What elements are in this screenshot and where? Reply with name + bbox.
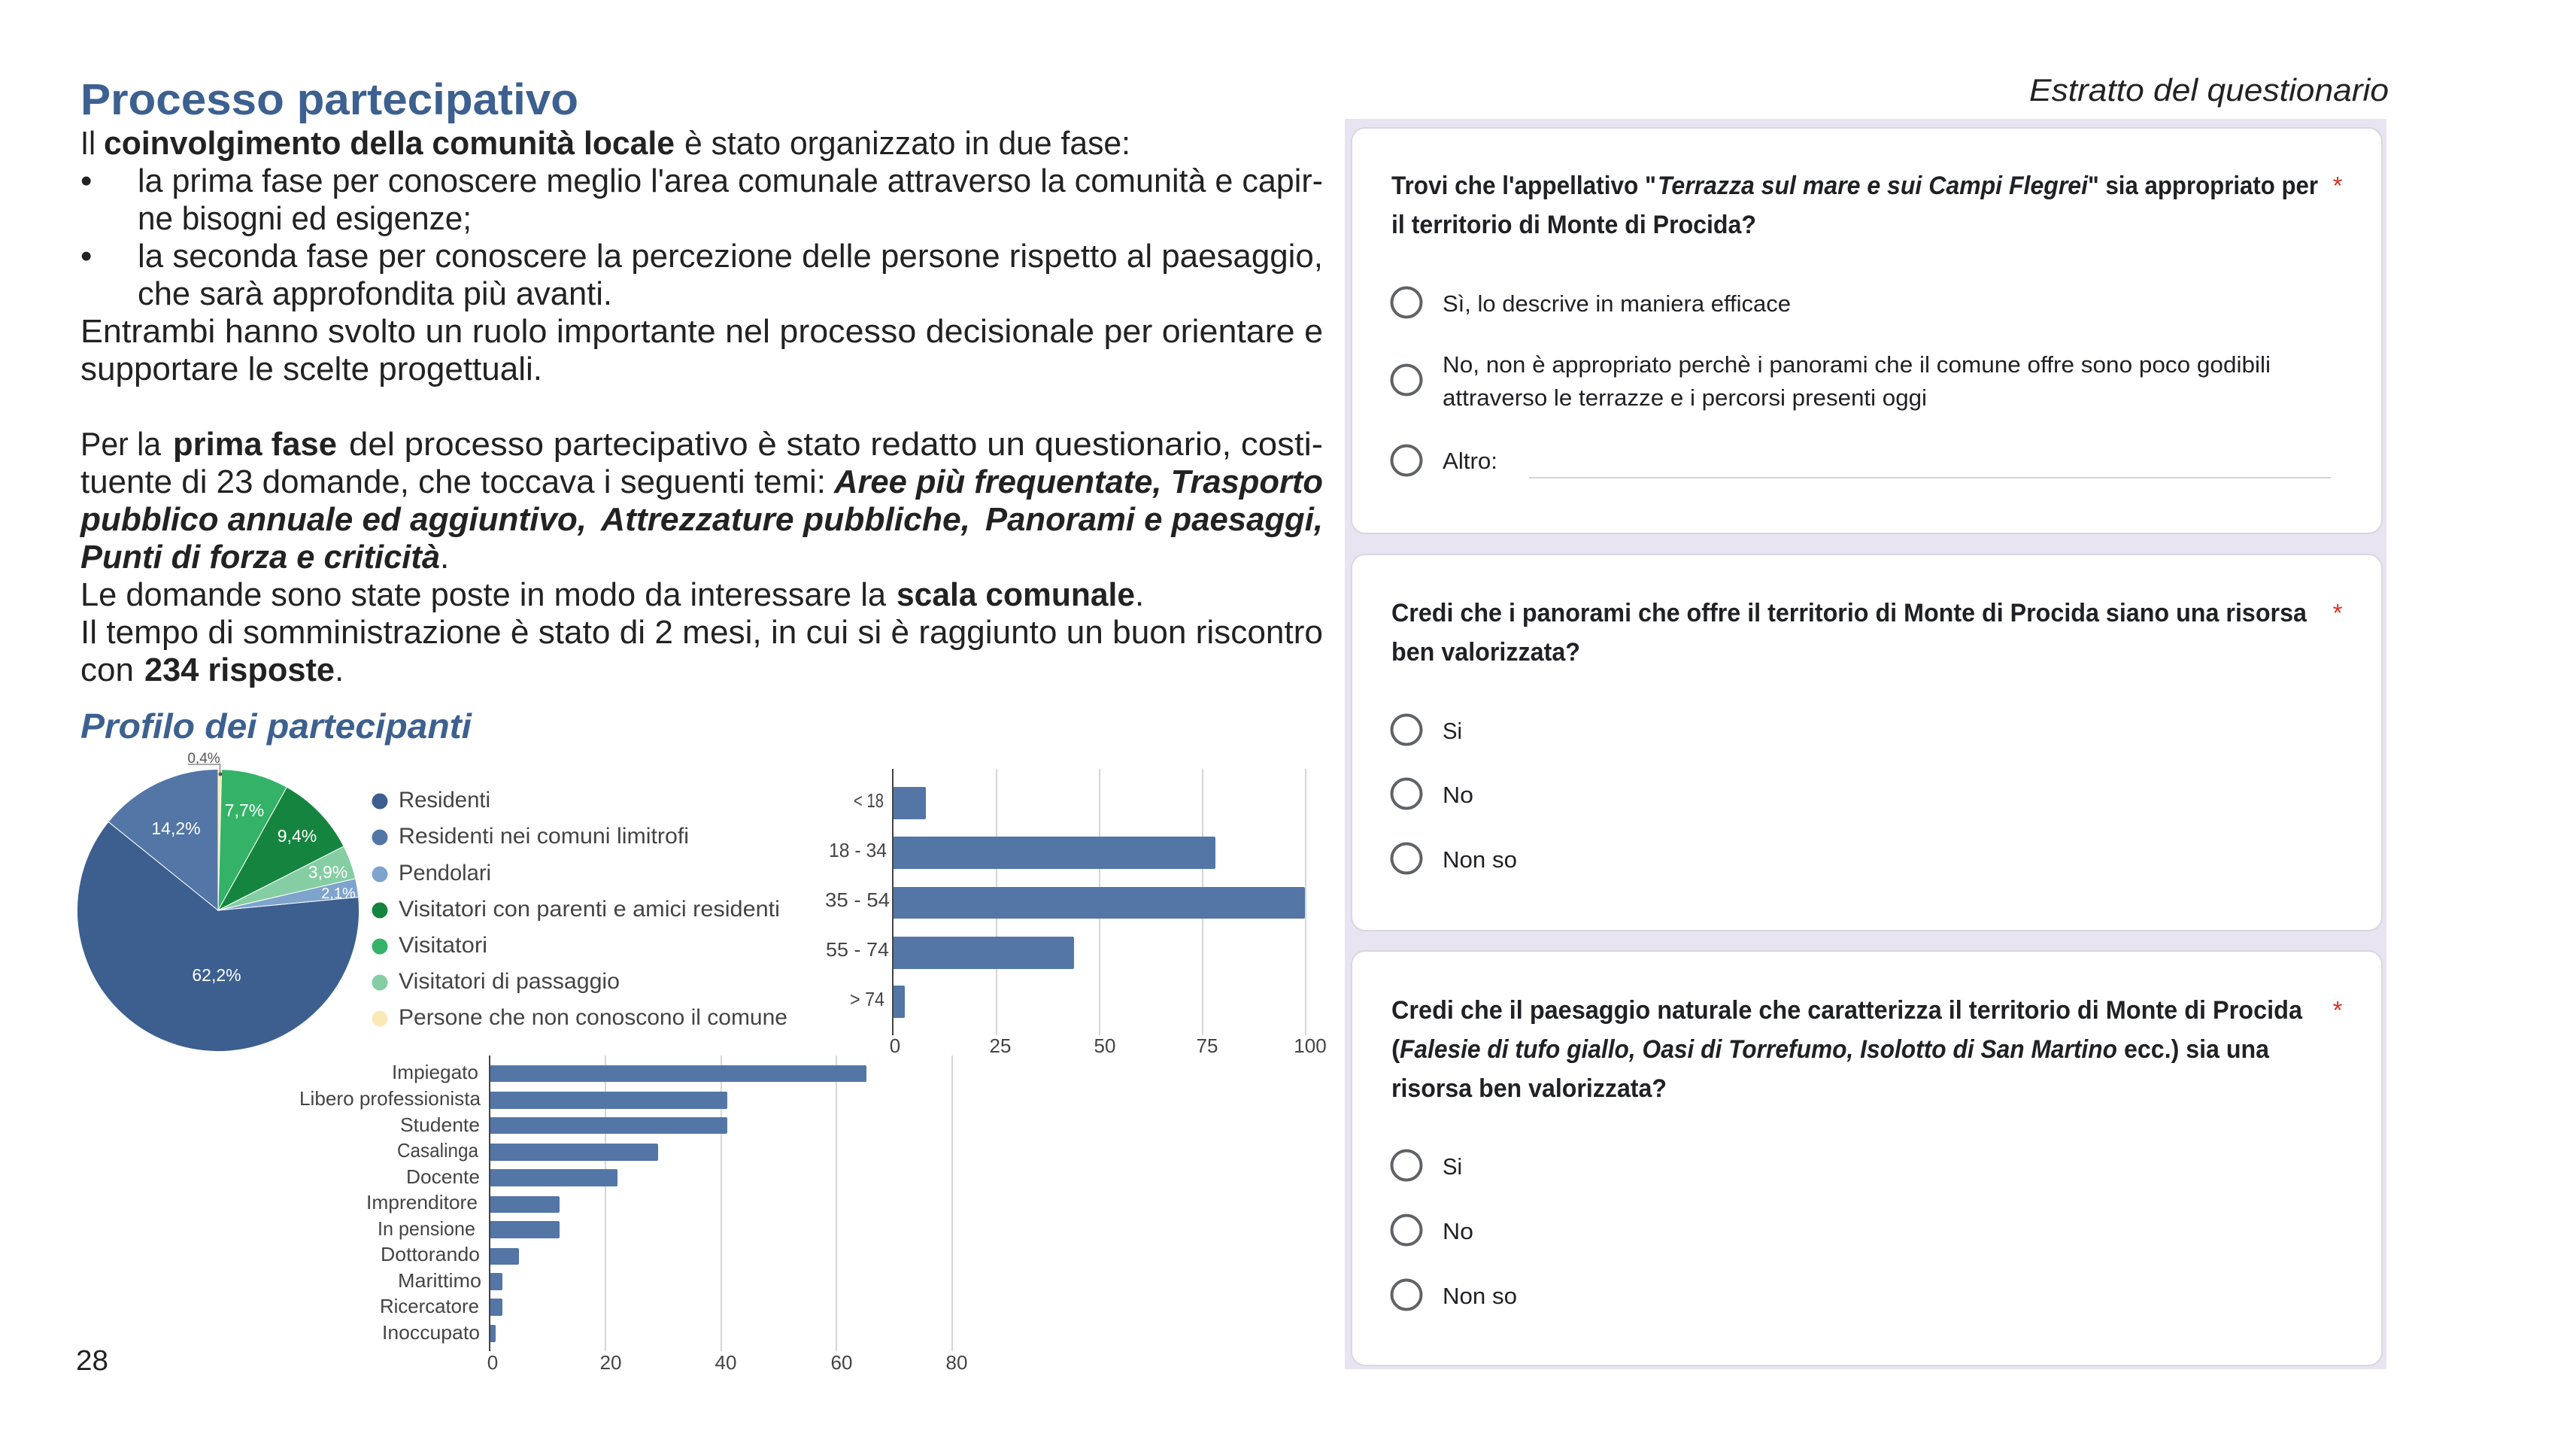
pie chart: participant types: 9,4%: [278, 826, 317, 846]
bar chart: occupations: Docente: [406, 1165, 480, 1188]
legend: participant types: Visitatori di passaggio: [399, 969, 620, 994]
card: question 2: [1352, 554, 2382, 931]
text block: first phase: [80, 426, 1323, 688]
card: question 1: il territorio di Monte di Procida?: [1391, 211, 1756, 239]
text block: community involvement: [80, 125, 1323, 387]
text block: community involvement: Il: [80, 125, 96, 162]
card: question 1: *: [2333, 172, 2343, 199]
bar chart: occupations: 0: [487, 1351, 498, 1374]
card: question 1: Trovi che l'appellativo ": [1391, 172, 1656, 200]
card: question 1: [1352, 128, 2382, 533]
card: question 3: *: [2333, 996, 2343, 1024]
text block: community involvement: la seconda fase per conoscere la percezione delle persone rispetto al paesaggio,: [138, 238, 1323, 275]
text block: community involvement: •: [80, 163, 92, 199]
text block: first phase: prima fase: [173, 426, 337, 463]
legend: participant types: Visitatori: [399, 933, 487, 958]
text block: first phase: Attrezzature pubbliche,: [600, 501, 970, 538]
card: question 3: Si: [1443, 1153, 1462, 1180]
text block: first phase: Le domande sono state poste in modo da interessare la: [80, 576, 887, 613]
text block: community involvement: che sarà approfondita più avanti.: [138, 275, 612, 312]
card: question 1: Altro:: [1443, 448, 1497, 474]
card: question 1: " sia appropriato per: [2088, 172, 2318, 200]
text block: first phase: .: [440, 539, 449, 576]
bar chart: occupations: 80: [946, 1351, 967, 1374]
bar chart: age groups: 0: [890, 1034, 900, 1057]
text block: first phase: .: [335, 652, 344, 688]
legend: participant types: [372, 788, 787, 1030]
bar chart: occupations: In pensione: [378, 1217, 475, 1240]
bar chart: occupations: Inoccupato: [382, 1321, 480, 1344]
legend: participant types: Residenti nei comuni limitrofi: [399, 824, 689, 849]
bar chart: age groups: > 74: [850, 988, 884, 1010]
text block: first phase: tuente di 23 domande, che toccava i seguenti temi:: [80, 463, 826, 500]
legend: participant types: Persone che non conoscono il comune: [399, 1005, 787, 1030]
bar chart: age groups: 55 - 74: [826, 938, 889, 961]
text block: first phase: .: [1135, 576, 1144, 613]
bar chart: age groups: < 18: [854, 789, 884, 812]
text block: first phase: Aree più frequentate, Trasporto: [833, 463, 1323, 500]
text block: first phase: Panorami e paesaggi,: [985, 501, 1323, 538]
text block: community involvement: Entrambi hanno svolto un ruolo importante nel processo decisionale per orientare e: [80, 313, 1323, 350]
card: question 2: Credi che i panorami che offre il territorio di Monte di Procida siano una risorsa: [1391, 599, 2307, 627]
card: question 3: Falesie di tufo giallo, Oasi di Torrefumo, Isolotto di San Martino: [1400, 1035, 2117, 1064]
card: question 1: attraverso le terrazze e i percorsi presenti oggi: [1443, 384, 1927, 411]
bar chart: age groups: 35 - 54: [825, 889, 890, 911]
pie chart: participant types: 7,7%: [225, 800, 264, 820]
text block: community involvement: la prima fase per conoscere meglio l'area comunale attraverso la comunità e capir-: [138, 163, 1323, 199]
bar chart: occupations: Casalinga: [397, 1139, 478, 1162]
bar chart: occupations: Dottorando: [381, 1243, 480, 1265]
panel: questionnaire: [1345, 119, 2386, 1369]
card: question 3: risorsa ben valorizzata?: [1391, 1074, 1667, 1103]
text block: community involvement: ne bisogni ed esigenze;: [138, 200, 472, 237]
bar chart: age groups: 50: [1094, 1034, 1115, 1057]
text block: community involvement: coinvolgimento della comunità locale: [104, 125, 675, 162]
card: question 2: Si: [1443, 718, 1462, 744]
bar chart: occupations: Imprenditore: [366, 1191, 478, 1214]
bar chart: age groups: [825, 769, 1327, 1057]
text block: community involvement: è stato organizzato in due fase:: [684, 125, 1130, 162]
bar chart: age groups: 25: [990, 1034, 1011, 1057]
card: question 2: Non so: [1443, 846, 1517, 873]
bar chart: age groups: 18 - 34: [829, 839, 887, 861]
pie chart: participant types: 14,2%: [151, 819, 201, 838]
page number: 28: [76, 1345, 108, 1377]
bar chart: age groups: 75: [1197, 1034, 1218, 1057]
card: question 1: Sì, lo descrive in maniera efficace: [1443, 290, 1791, 317]
text block: first phase: pubblico annuale ed aggiuntivo,: [80, 501, 587, 538]
text block: first phase: Per la: [80, 426, 161, 463]
bar chart: occupations: Marittimo: [398, 1269, 481, 1292]
card: question 3: No: [1443, 1218, 1473, 1244]
pie chart: participant types: 2,1%: [321, 886, 356, 902]
text block: first phase: Il tempo di somministrazione è stato di 2 mesi, in cui si è raggiunto un buon riscontro: [80, 614, 1323, 651]
card: question 2: *: [2333, 599, 2343, 627]
bar chart: occupations: Studente: [400, 1113, 480, 1136]
pie chart: participant types: 62,2%: [192, 965, 241, 985]
bar chart: occupations: 40: [715, 1351, 736, 1374]
heading: participant profile: Profilo dei partecipanti: [80, 706, 472, 746]
card: question 2: No: [1443, 782, 1473, 808]
card: question 3: Non so: [1443, 1283, 1517, 1309]
text block: first phase: del processo partecipativo è stato redatto un questionario, costi-: [349, 426, 1323, 463]
card: question 1: No, non è appropriato perchè i panorami che il comune offre sono poco godibili: [1443, 351, 2271, 378]
text block: community involvement: supportare le scelte progettuali.: [80, 351, 542, 387]
legend: participant types: Visitatori con parenti e amici residenti: [399, 897, 780, 922]
card: question 3: (: [1391, 1035, 1400, 1064]
card: question 3: Credi che il paesaggio naturale che caratterizza il territorio di Monte di Procida: [1391, 996, 2303, 1025]
pie chart: participant types: 0,4%: [187, 751, 220, 767]
text block: first phase: Punti di forza e criticità: [80, 539, 440, 576]
text block: first phase: scala comunale: [897, 576, 1135, 613]
card: question 3: ecc.) sia una: [2124, 1035, 2270, 1064]
text block: first phase: 234 risposte: [144, 652, 335, 688]
legend: participant types: Residenti: [399, 788, 490, 813]
bar chart: occupations: Ricercatore: [380, 1295, 479, 1317]
bar chart: occupations: Impiegato: [392, 1061, 478, 1083]
card: question 1: Terrazza sul mare e sui Campi Flegrei: [1658, 172, 2089, 200]
bar chart: occupations: 60: [831, 1351, 852, 1374]
bar chart: occupations: [299, 1056, 967, 1374]
text block: first phase: con: [80, 652, 134, 688]
legend: participant types: Pendolari: [399, 861, 491, 886]
bar chart: age groups: 100: [1294, 1034, 1327, 1057]
pie chart: participant types: 3,9%: [308, 862, 347, 882]
caption: questionnaire extract: Estratto del questionario: [2029, 72, 2389, 108]
text block: community involvement: •: [80, 238, 92, 275]
pie chart: participant types: [77, 751, 360, 1052]
bar chart: occupations: Libero professionista: [299, 1087, 481, 1110]
title: Processo partecipativo: [80, 75, 578, 124]
card: question 3: [1352, 951, 2382, 1365]
card: question 2: ben valorizzata?: [1391, 638, 1580, 667]
bar chart: occupations: 20: [600, 1351, 621, 1374]
